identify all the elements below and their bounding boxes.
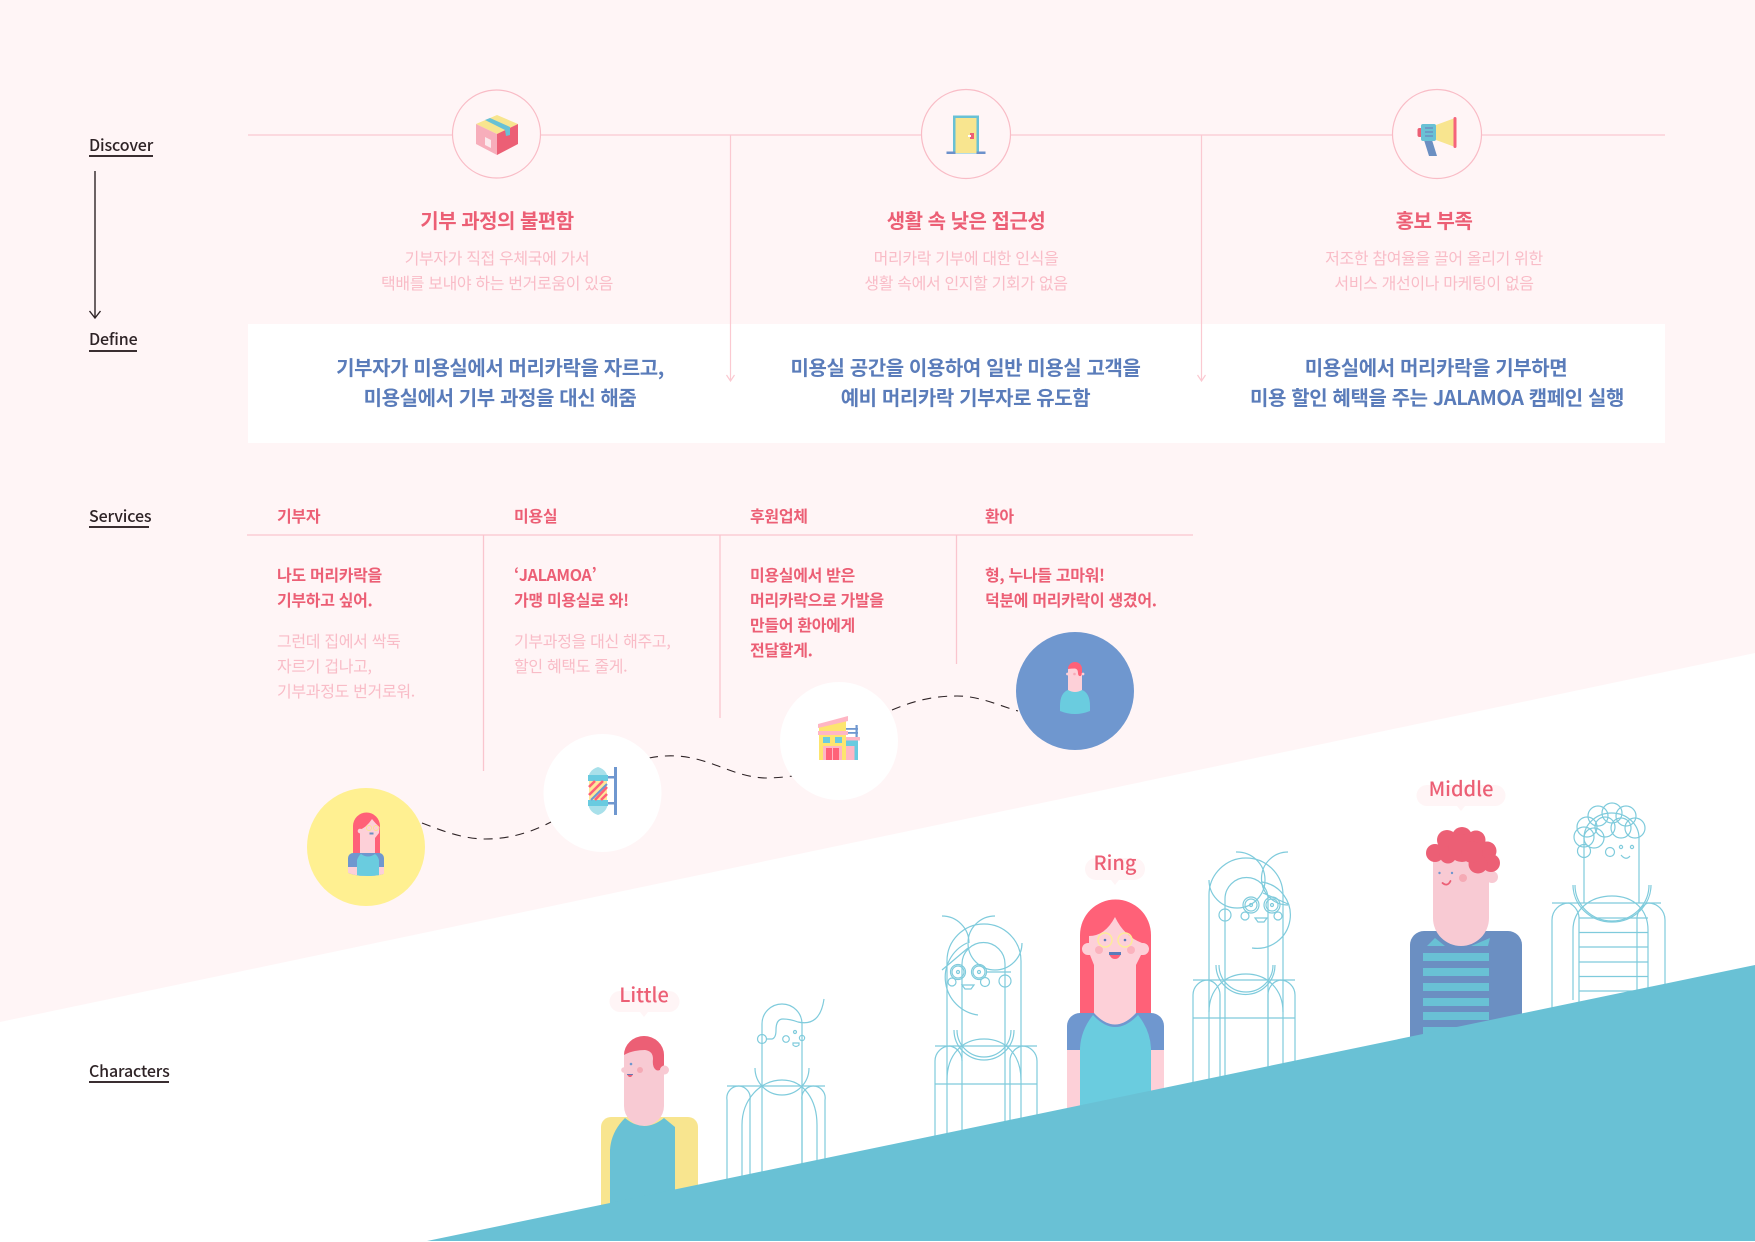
character bubble: Little: Little (619, 979, 669, 1008)
character bubble: Middle (1417, 773, 1506, 811)
define text 2 (790, 352, 1140, 411)
service column: patient: 형, 누나들 고마워! (985, 562, 1105, 586)
wireframe: Ring right (1193, 852, 1295, 1140)
define text 3: 미용 할인 혜택을 주는 JALAMOA 캠페인 실행 (1250, 382, 1624, 411)
character: Ring (1067, 900, 1164, 1210)
discover column 1 text: 기부 과정의 불편함 (420, 205, 574, 234)
service column: donor: 자르기 겁나고, (277, 653, 372, 677)
discover column 3 text: 홍보 부족 (1396, 205, 1472, 234)
wireframe: Middle (1552, 803, 1665, 1010)
service column: donor: 기부하고 싶어. (277, 587, 373, 611)
section label: Define: Define (89, 326, 138, 350)
discover column 2 text: 생활 속 낮은 접근성 (887, 205, 1045, 234)
service column: salon (514, 503, 670, 677)
service node: donor (307, 788, 425, 906)
service node: sponsor building (780, 682, 898, 800)
discover timeline (248, 135, 1665, 381)
character: Middle (1410, 827, 1522, 1100)
discover column 1 text (381, 205, 613, 294)
define text 3 (1250, 352, 1624, 411)
wireframe: Ring left (935, 916, 1037, 1240)
define text 1: 미용실에서 기부 과정을 대신 해줌 (364, 382, 636, 411)
define text 3: 미용실에서 머리카락을 기부하면 (1305, 352, 1567, 381)
service column: patient: 환아 (985, 503, 1014, 527)
define text 1 (336, 352, 664, 411)
service node: salon barber pole (544, 734, 662, 852)
services table lines (247, 535, 1193, 771)
character: Little (601, 1036, 698, 1230)
discover column 3 text: 서비스 개선이나 마케팅이 없음 (1334, 270, 1534, 294)
discover column 3 text: 저조한 참여율을 끌어 올리기 위한 (1325, 245, 1543, 269)
define text 1: 기부자가 미용실에서 머리카락을 자르고, (336, 352, 664, 381)
service column: sponsor (750, 503, 884, 661)
wireframe: Little (727, 999, 825, 1180)
service column: patient (985, 503, 1157, 611)
service column: donor: 기부과정도 번거로워. (277, 678, 415, 702)
service column: sponsor: 후원업체 (750, 503, 808, 527)
character bubble: Ring (1085, 847, 1145, 885)
character bubble: Little (610, 979, 680, 1017)
service column: donor (277, 503, 415, 702)
discover column 2 text: 생활 속에서 인지할 기회가 없음 (864, 270, 1068, 294)
service column: salon: 미용실 (514, 503, 557, 527)
service node: patient (1016, 632, 1134, 750)
discover column 1 text: 택배를 보내야 하는 번거로움이 있음 (381, 270, 613, 294)
arrow: Discover to Define (90, 171, 100, 318)
discover column 1 text: 기부자가 직접 우체국에 가서 (405, 245, 589, 269)
define text 2: 미용실 공간을 이용하여 일반 미용실 고객을 (790, 352, 1140, 381)
service column: salon: 가맹 미용실로 와! (514, 587, 629, 611)
define text 2: 예비 머리카락 기부자로 유도함 (841, 382, 1090, 411)
service column: sponsor: 미용실에서 받은 (750, 562, 856, 586)
teal ground diagonal (427, 965, 1755, 1241)
service column: donor: 그런데 집에서 싹둑 (277, 628, 401, 652)
service column: salon: ‘JALAMOA’ (514, 562, 596, 586)
service column: donor: 나도 머리카락을 (277, 562, 383, 586)
discover column 2 text (864, 205, 1068, 294)
icon: door (922, 90, 1010, 178)
service column: salon: 기부과정을 대신 해주고, (514, 628, 670, 652)
section label: Characters: Characters (89, 1058, 170, 1082)
icon: parcel box (452, 90, 540, 178)
section label: Discover: Discover (89, 132, 154, 156)
character bubble: Middle: Middle (1429, 773, 1493, 802)
service column: sponsor: 머리카락으로 가발을 (750, 587, 884, 611)
define band (248, 324, 1665, 443)
service column: patient: 덕분에 머리카락이 생겼어. (985, 587, 1157, 611)
service column: salon: 할인 혜택도 줄게. (514, 653, 627, 677)
character bubble: Ring: Ring (1094, 847, 1137, 876)
service column: donor: 기부자 (277, 503, 321, 527)
discover column 2 text: 머리카락 기부에 대한 인식을 (874, 245, 1058, 269)
discover column 3 text (1325, 205, 1543, 294)
icon: megaphone (1392, 90, 1482, 178)
service column: sponsor: 전달할게. (750, 637, 813, 661)
service column: sponsor: 만들어 환아에게 (750, 612, 855, 636)
dashed connectors (422, 696, 1018, 839)
section label: Services: Services (89, 503, 152, 527)
